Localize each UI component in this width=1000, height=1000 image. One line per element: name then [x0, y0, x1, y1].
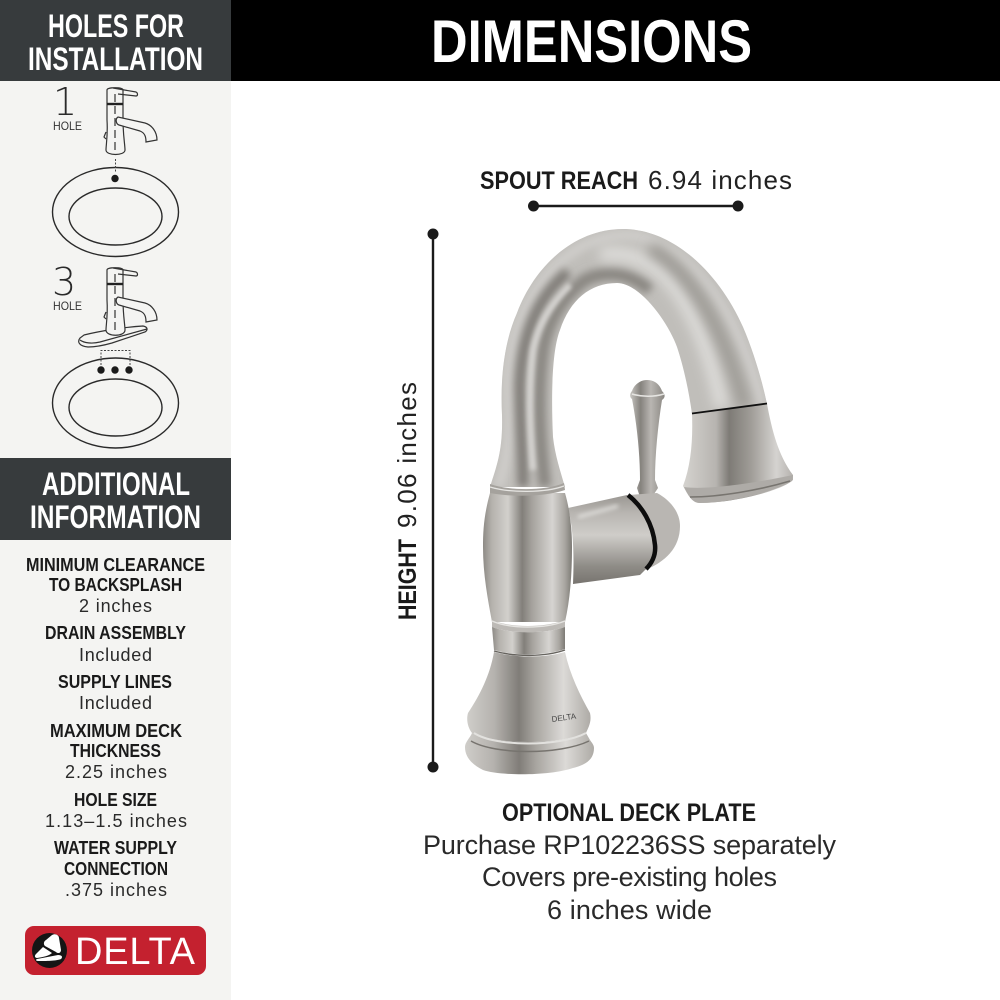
faucet base	[465, 650, 594, 774]
spec: maximum deck thickness: MAXIMUM DECK	[50, 721, 182, 741]
spec: water supply connection: WATER SUPPLY	[54, 838, 177, 858]
logo: delta: DELTA	[75, 931, 196, 973]
label: 1 hole	[53, 80, 82, 133]
dimension label: height	[392, 382, 422, 620]
spec: water supply connection: CONNECTION	[64, 859, 168, 879]
icon: three hole faucet with deck plate	[79, 268, 157, 347]
spout tube	[490, 229, 767, 487]
dimension label: spout reach: 6.94 inches	[648, 165, 792, 195]
heading: holes for installation	[0, 0, 231, 81]
dimension label: spout reach	[480, 165, 792, 195]
icon: single hole sink	[52, 159, 178, 256]
text block: optional deck plate	[423, 799, 836, 925]
text block: optional deck plate: 6 inches wide	[547, 895, 712, 925]
text block: optional deck plate: OPTIONAL DECK PLATE	[502, 799, 756, 827]
faucet body	[483, 483, 572, 654]
logo: delta	[25, 926, 206, 975]
brand mark on base: DELTA	[551, 712, 577, 724]
title banner: dimensions: DIMENSIONS	[431, 8, 752, 75]
heading: additional information: ADDITIONAL	[42, 466, 190, 502]
spec: minimum clearance: MINIMUM CLEARANCE	[26, 555, 205, 575]
label: 1 hole: HOLE	[53, 119, 82, 133]
spec: drain assembly: DRAIN ASSEMBLY	[45, 623, 186, 643]
label: 3 hole	[52, 260, 82, 313]
spec: maximum deck thickness	[50, 721, 182, 782]
dimension label: height: HEIGHT	[394, 539, 422, 620]
dimension label: spout reach: SPOUT REACH	[480, 167, 638, 195]
handle cap	[628, 493, 680, 570]
three hole installation diagram	[52, 260, 178, 448]
text block: optional deck plate: Purchase RP102236SS separately	[423, 830, 836, 860]
spec: water supply connection: .375 inches	[65, 880, 167, 900]
text block: additional information specs	[26, 555, 205, 900]
handle arm	[568, 495, 655, 584]
title banner: dimensions	[231, 0, 1000, 81]
spec: minimum clearance: 2 inches	[79, 596, 152, 616]
text block: optional deck plate: Covers pre-existing holes	[482, 862, 777, 892]
spec: minimum clearance	[26, 555, 205, 616]
lever handle	[630, 380, 665, 497]
arrow: spout reach dimension line	[528, 200, 744, 212]
spec: supply lines	[58, 672, 172, 713]
spray head	[683, 404, 793, 503]
heading: additional information	[0, 458, 231, 540]
heading: holes for installation: HOLES FOR	[48, 8, 184, 44]
spec: maximum deck thickness: THICKNESS	[70, 741, 161, 761]
one hole installation diagram	[52, 80, 178, 256]
panel: left sidebar	[0, 0, 231, 1000]
dimension label: height: 9.06 inches	[392, 382, 422, 528]
spec: supply lines: SUPPLY LINES	[58, 672, 172, 692]
spec: maximum deck thickness: 2.25 inches	[65, 762, 167, 782]
spec: hole size	[45, 790, 187, 831]
label: 3 hole: 3	[52, 260, 76, 304]
icon: single hole faucet	[104, 88, 157, 154]
spec: water supply connection	[54, 838, 177, 900]
heading: holes for installation: INSTALLATION	[28, 41, 203, 77]
spec: minimum clearance: TO BACKSPLASH	[49, 575, 182, 595]
label: 3 hole: HOLE	[53, 299, 82, 313]
spec: supply lines: Included	[79, 693, 152, 713]
illustration: faucet	[465, 229, 793, 774]
spec: drain assembly	[45, 623, 186, 665]
icon: three hole sink	[52, 350, 178, 448]
arrow: height dimension line	[428, 228, 438, 772]
spec: drain assembly: Included	[79, 645, 152, 665]
label: 1 hole: 1	[53, 80, 77, 124]
spec: hole size: HOLE SIZE	[74, 790, 157, 810]
spec: hole size: 1.13–1.5 inches	[45, 811, 187, 831]
heading: additional information: INFORMATION	[30, 499, 201, 535]
